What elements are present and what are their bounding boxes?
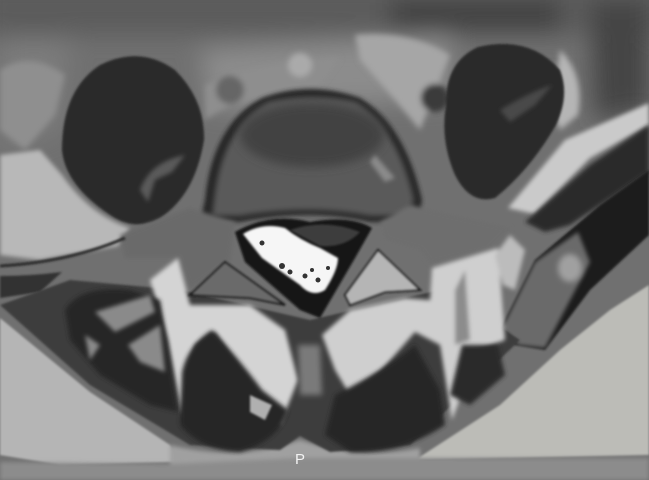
- vertebral body: [200, 89, 422, 222]
- nerve roots: [260, 240, 330, 282]
- left psoas muscle: [62, 56, 204, 224]
- lower right skin and subcutaneous fat: [415, 285, 649, 460]
- right lateral muscle: [450, 345, 505, 405]
- midline subcutaneous fat: [170, 440, 420, 470]
- thecal sac bright CSF: [243, 226, 338, 293]
- paraspinal fat, left and right: [150, 235, 525, 425]
- posterior muscle compartment outline: [0, 280, 520, 452]
- midline spinous process: [298, 345, 322, 395]
- spinal canal wall: [235, 219, 372, 318]
- left lateral muscle fat streaks: [85, 295, 165, 372]
- left lateral multifidus muscle: [65, 289, 178, 412]
- upper abdominal soft tissue: [0, 0, 649, 150]
- right paraspinal gray muscle: [500, 170, 649, 350]
- bright fat streaks upper: [0, 34, 580, 150]
- right dark muscle band: [525, 125, 649, 232]
- right diagonal fat band: [508, 103, 649, 214]
- facet joint right: [345, 250, 420, 305]
- bottom skin edge: [0, 458, 649, 480]
- left medial muscle fat speck: [250, 395, 272, 420]
- facet joint left: [190, 262, 285, 305]
- epidural gray tissue in canal: [290, 224, 360, 246]
- left medial muscle: [180, 330, 288, 452]
- right pedicle and transverse process: [380, 205, 512, 264]
- right medial muscle: [325, 345, 445, 452]
- lower left skin and subcutaneous fat: [0, 318, 180, 465]
- dark strip left: [0, 272, 62, 298]
- orientation label: P: [295, 451, 305, 468]
- left flank light tissue: [0, 150, 130, 260]
- left rim of thin dark line: [0, 238, 125, 266]
- right psoas muscle: [444, 44, 564, 199]
- left pedicle and transverse process: [120, 208, 235, 290]
